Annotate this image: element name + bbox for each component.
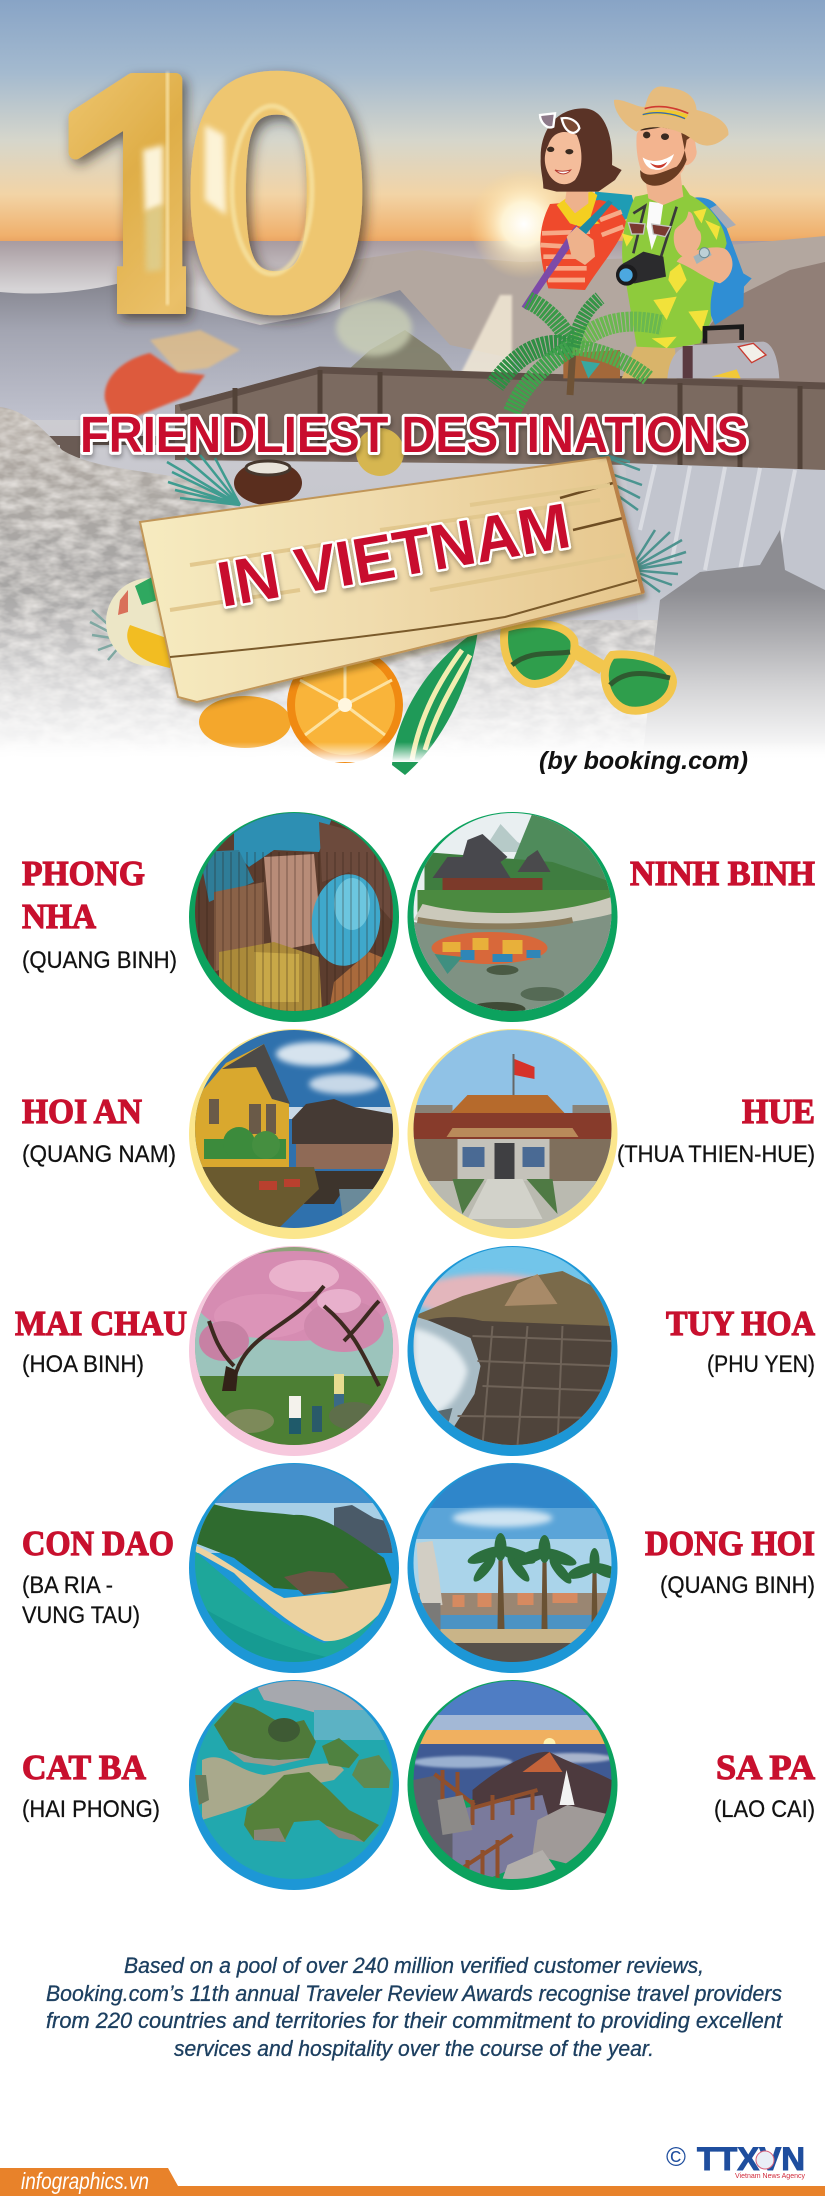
digit 0: 0 xyxy=(181,6,372,379)
photo circle: Mai Chau blossoms xyxy=(189,1246,399,1456)
photo circle: Hue citadel xyxy=(408,1029,618,1239)
beach decorations behind sign xyxy=(0,428,825,775)
big number 10 xyxy=(64,67,376,328)
destination 1: Phong Nha: PHONG xyxy=(22,854,145,893)
logo: TTXVN: TTXVN xyxy=(697,2141,805,2177)
hero panel: landscape background xyxy=(0,0,825,788)
destination 1: Phong Nha xyxy=(22,854,177,974)
illustration: suitcase xyxy=(667,327,779,378)
logo: TTXVN: Vietnam News Agency xyxy=(735,2171,805,2180)
illustration: tourist couple xyxy=(522,86,779,378)
mist fade xyxy=(0,590,825,760)
destination 1: Phong Nha: (QUANG BINH) xyxy=(22,947,177,974)
photo circle: Cat Ba xyxy=(189,1680,399,1890)
destination 10: Sa Pa xyxy=(714,1748,816,1823)
photo circle: Phong Nha cave xyxy=(189,812,399,1022)
photo circle: Tuy Hoa rocks xyxy=(408,1246,618,1456)
gold highlights xyxy=(143,72,312,305)
destination 9: Cat Ba xyxy=(22,1748,160,1823)
destination 6: Tuy Hoa xyxy=(666,1304,816,1378)
destination 9: Cat Ba: (HAI PHONG) xyxy=(22,1796,160,1823)
description paragraph: Based on a pool of over 240 million verified customer reviews, xyxy=(124,1953,704,1978)
surfboard xyxy=(392,630,478,775)
destination 2: Ninh Binh: NINH BINH xyxy=(630,854,815,893)
destination 7: Con Dao: VUNG TAU) xyxy=(22,1602,140,1629)
description paragraph: Booking.com’s 11th annual Traveler Review Awards recognise travel providers xyxy=(46,1981,782,2006)
illustration: tourist box xyxy=(563,350,620,378)
logo: TTXVN: © xyxy=(666,2142,686,2172)
destination 8: Dong Hoi: (QUANG BINH) xyxy=(660,1572,815,1599)
destination 8: Dong Hoi xyxy=(645,1524,815,1599)
destination 3: Hoi An xyxy=(22,1092,176,1168)
description paragraph: services and hospitality over the course of the year. xyxy=(174,2036,654,2061)
near mountains xyxy=(0,283,520,420)
dark hill at right xyxy=(640,530,825,780)
title: in Vietnam: IN VIETNAM xyxy=(212,489,575,621)
digit 1: 1 xyxy=(53,8,237,377)
description paragraph: from 220 countries and territories for their commitment to providing excellent xyxy=(46,2008,783,2033)
red beach object xyxy=(105,330,240,420)
photo circle: Hoi An xyxy=(189,1029,399,1239)
wooden sign xyxy=(140,457,643,702)
photo circle: Sa Pa xyxy=(408,1680,618,1890)
left rock outcrop xyxy=(0,407,825,780)
destination 3: Hoi An: HOI AN xyxy=(22,1092,142,1131)
source note: (by booking.com) xyxy=(539,747,748,775)
coconut xyxy=(234,461,302,505)
destination 5: Mai Chau: (HOA BINH) xyxy=(22,1351,144,1378)
destination 4: Hue xyxy=(617,1092,815,1168)
footer bar xyxy=(0,2168,825,2196)
footer bar: infographics.vn xyxy=(21,2168,149,2194)
destination 6: Tuy Hoa: TUY HOA xyxy=(666,1304,816,1343)
destination 7: Con Dao: (BA RIA - xyxy=(22,1572,113,1599)
photo circle: Dong Hoi xyxy=(408,1463,624,1673)
photo circle: Con Dao xyxy=(189,1463,399,1673)
description paragraph xyxy=(46,1953,783,2061)
beach ball xyxy=(106,578,194,666)
destination 7: Con Dao xyxy=(22,1524,174,1629)
destination 7: Con Dao: CON DAO xyxy=(22,1524,174,1563)
destination 5: Mai Chau: MAI CHAU xyxy=(15,1304,187,1343)
destination 10: Sa Pa: (LAO CAI) xyxy=(714,1796,815,1823)
teal fern leaves xyxy=(90,455,686,660)
logo: TTXVN xyxy=(666,2141,805,2180)
destination 5: Mai Chau xyxy=(15,1304,187,1378)
destination 1: Phong Nha: NHA xyxy=(22,897,97,936)
destination 3: Hoi An: (QUANG NAM) xyxy=(22,1141,176,1168)
wooden walkway railing xyxy=(175,368,825,472)
destination 10: Sa Pa: SA PA xyxy=(716,1748,816,1787)
illustration: man tourist xyxy=(614,86,752,378)
photo circle: Ninh Binh xyxy=(408,812,618,1022)
illustration: woman tourist xyxy=(522,108,637,310)
title: friendliest destinations: FRIENDLIEST DESTINATIONS xyxy=(80,406,748,463)
orange slices xyxy=(199,696,291,748)
deck floor xyxy=(625,463,825,640)
palm tree xyxy=(495,298,662,412)
far haze layer xyxy=(0,241,825,640)
sunglasses xyxy=(573,650,603,668)
sun glow xyxy=(469,169,579,279)
destination 8: Dong Hoi: DONG HOI xyxy=(645,1524,815,1563)
destination 4: Hue: HUE xyxy=(742,1092,815,1131)
destination 9: Cat Ba: CAT BA xyxy=(22,1748,147,1787)
